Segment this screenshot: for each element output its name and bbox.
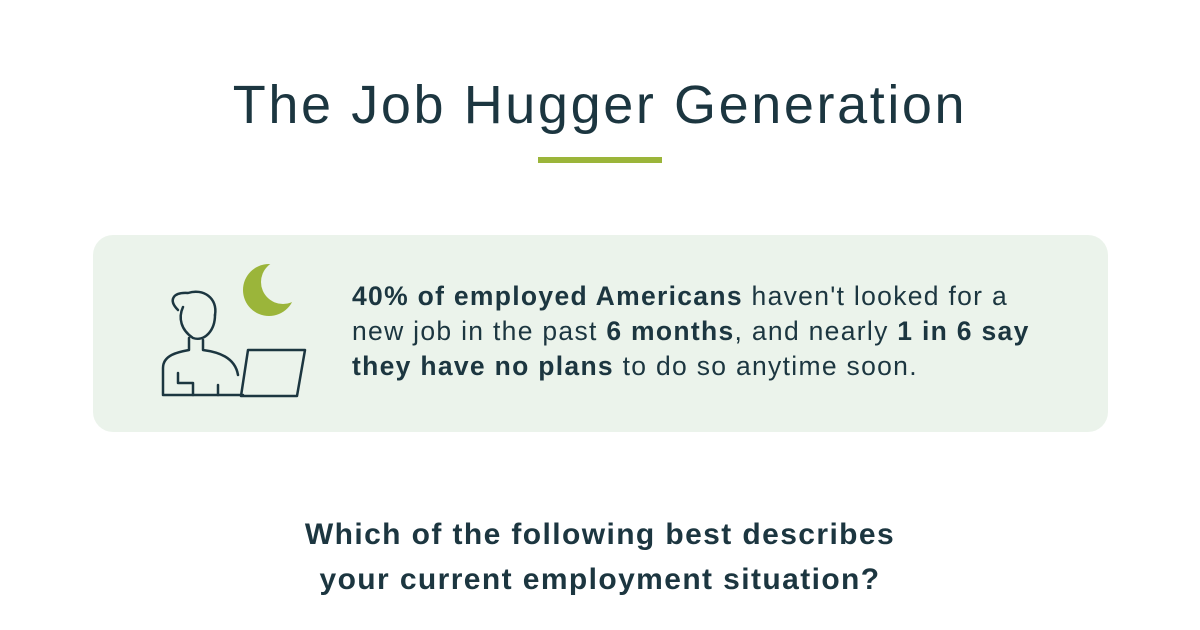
icon: person at laptop with moon — [162, 264, 306, 398]
title: The Job Hugger Generation — [233, 75, 967, 135]
stat text: they have no plans to do so anytime soon. — [352, 351, 918, 381]
title underline — [538, 157, 662, 163]
panel: stat callout — [93, 235, 1108, 432]
survey question: Which of the following best describes — [305, 518, 895, 551]
survey question: your current employment situation? — [320, 563, 880, 596]
survey question — [304, 518, 895, 596]
stat text — [352, 281, 1030, 381]
stat text: new job in the past 6 months, and nearly 1 in 6 say — [352, 316, 1030, 346]
stat text: 40% of employed Americans haven't looked for a — [352, 281, 1008, 311]
